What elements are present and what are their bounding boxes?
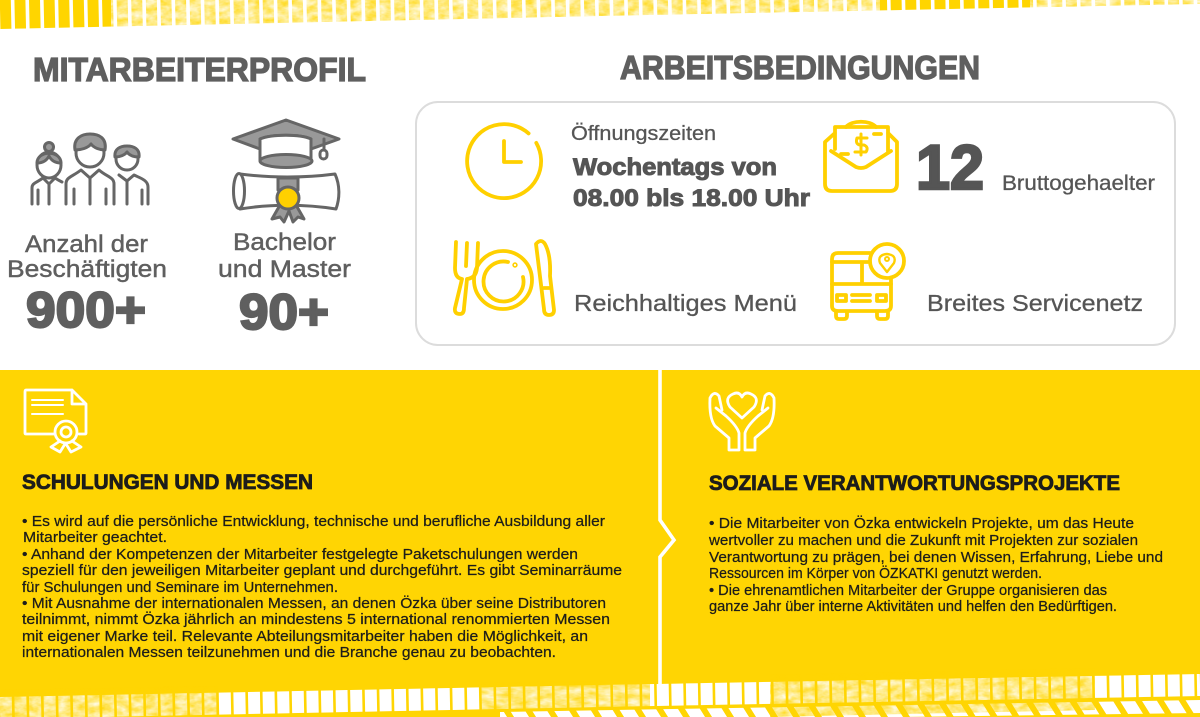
opening hours text: Wochentags von: [573, 154, 777, 181]
text block: Schulungen und Messen: internationalen Messen teilzunehmen und die Branche genau zu beobachten.: [22, 644, 556, 661]
top tire track band: [0, 0, 1200, 27]
text block: Schulungen und Messen: Mitarbeiter geachtet.: [23, 529, 167, 546]
salary count: Bruttogehaelter: [1002, 172, 1155, 195]
text block: Schulungen und Messen: speziell für den jeweiligen Mitarbeiter geplant und durchgeführt. Es gibt Seminarräume: [22, 562, 622, 579]
stat: employees: Anzahl der: [25, 231, 148, 258]
text block: Soziale Verantwortungsprojekte: [708, 514, 1163, 615]
panel: working conditions: [416, 102, 1175, 345]
icon: graduation cap and diploma: [233, 120, 339, 222]
icon: clock: [467, 124, 541, 198]
opening hours text: 08.00 bls 18.00 Uhr: [573, 185, 810, 212]
icon: three employees: [32, 134, 148, 204]
icon: envelope with money: [825, 122, 897, 191]
salary count: 12: [916, 133, 984, 203]
text block: Schulungen und Messen: teilnimmt, nimmt Özka jährlich an mindestens 5 international renommierten Messen: [22, 610, 610, 628]
stat: employees: Beschäftigten: [7, 256, 167, 283]
text block: Schulungen und Messen: • Es wird auf die persönliche Entwicklung, technische und berufliche Ausbildung aller: [22, 513, 605, 530]
text block: Schulungen und Messen: • Anhand der Kompetenzen der Mitarbeiter festgelegte Paketschulungen werden: [22, 546, 578, 563]
text block: Schulungen und Messen: mit eigener Marke teil. Relevante Abteilungsmitarbeiter haben die Möglichkeit, an: [22, 628, 588, 645]
icon: certificate: [25, 390, 86, 452]
rich menu label: Reichhaltiges Menü: [574, 290, 797, 316]
stat: employees: 900+: [26, 282, 146, 338]
opening hours text: [571, 123, 810, 212]
heading: Arbeitsbedingungen: ARBEITSBEDINGUNGEN: [620, 49, 980, 86]
text block: Soziale Verantwortungsprojekte: ganze Jahr über interne Aktivitäten und helfen den Bedürftigen.: [709, 598, 1117, 615]
text block: Soziale Verantwortungsprojekte: • Die ehrenamtlichen Mitarbeiter der Gruppe organisieren das: [709, 582, 1107, 599]
icon: bus with location pin: [832, 244, 904, 319]
stat: bachelor and master: 90+: [239, 284, 329, 340]
icon: hands holding heart: [710, 393, 774, 450]
salary count: [916, 133, 1155, 203]
text block: Schulungen und Messen: für Schulungen und Seminare im Unternehmen.: [22, 579, 338, 596]
text block: Soziale Verantwortungsprojekte: Ressourcen im Körper von ÖZKATKI genutzt werden.: [709, 564, 1042, 582]
divider with chevron: [660, 370, 674, 686]
yellow lower panel background: [0, 370, 1200, 717]
stat: bachelor and master: [218, 229, 351, 340]
text block: Soziale Verantwortungsprojekte: wertvoller zu machen und die Zukunft mit Projekten zur sozialen: [708, 532, 1138, 549]
service network label: Breites Servicenetz: [927, 290, 1143, 316]
heading: Schulungen und Messen: SCHULUNGEN UND MESSEN: [22, 471, 313, 494]
stat: bachelor and master: und Master: [218, 256, 351, 283]
stat: bachelor and master: Bachelor: [233, 229, 336, 256]
text block: Schulungen und Messen: • Mit Ausnahme der internationalen Messen, an denen Özka über seine Distributoren: [22, 594, 606, 612]
text block: Soziale Verantwortungsprojekte: Verantwortung zu prägen, bei denen Wissen, Erfahrung, Liebe und: [709, 549, 1163, 566]
heading: Mitarbeiterprofil: MITARBEITERPROFIL: [33, 51, 366, 88]
icon: plate and cutlery: [455, 241, 554, 315]
text block: Schulungen und Messen: [22, 513, 622, 661]
heading: Soziale Verantwortungsprojekte: SOZIALE VERANTWORTUNGSPROJEKTE: [709, 472, 1120, 495]
opening hours text: Öffnungszeiten: [571, 123, 716, 145]
text block: Soziale Verantwortungsprojekte: • Die Mitarbeiter von Özka entwickeln Projekte, um das Heute: [709, 514, 1134, 532]
bottom tire track band: [0, 668, 1200, 717]
stat: employees: [7, 231, 167, 338]
